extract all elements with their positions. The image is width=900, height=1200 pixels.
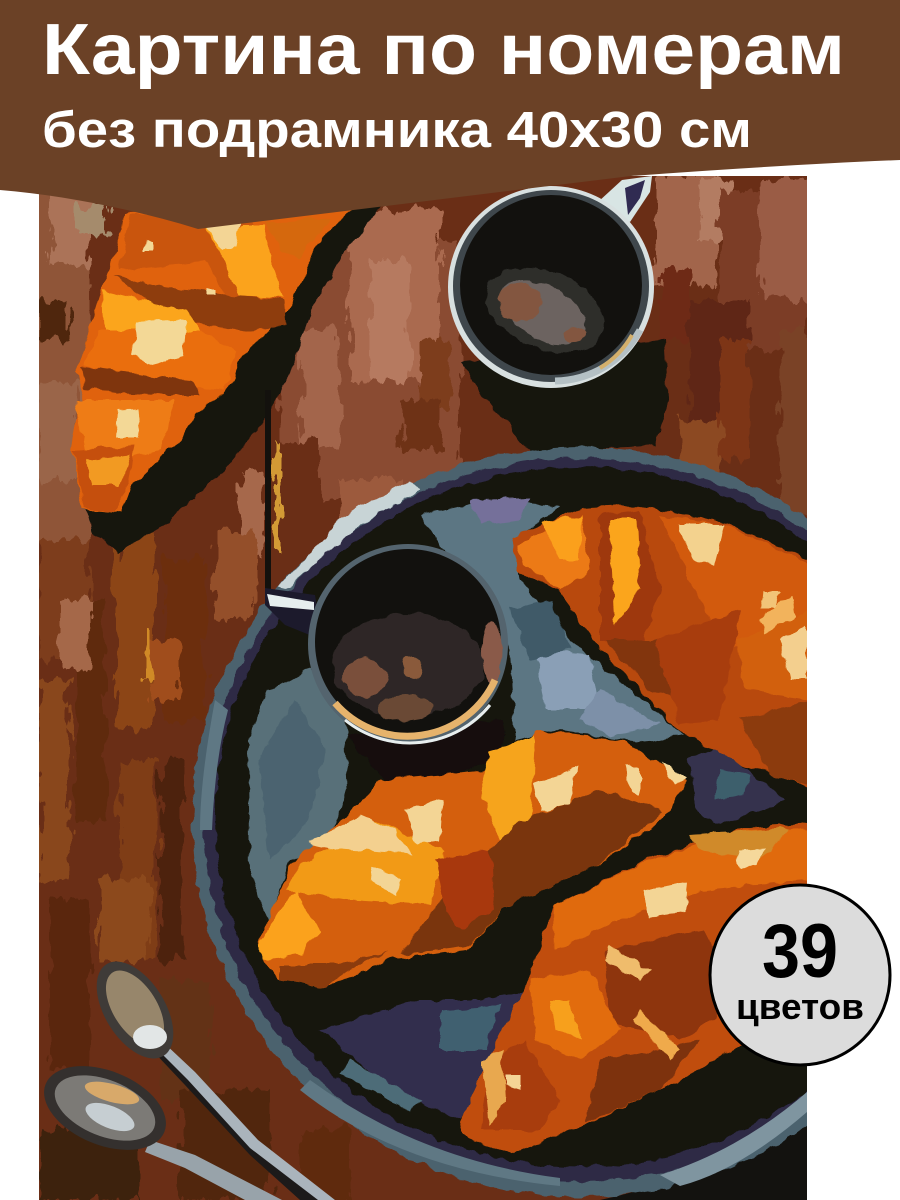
croissant shadow top left — [85, 200, 385, 552]
badge: 39 colours: цветов — [736, 986, 864, 1027]
plate bowl patches — [248, 498, 785, 1120]
wood table background — [20, 160, 830, 1200]
coffee cup shadow top — [460, 340, 668, 452]
subtitle: без подрамника 40х30 см — [42, 101, 752, 158]
spoon upper — [96, 962, 335, 1200]
dark corner behind plate — [600, 1126, 807, 1200]
painting: croissants and coffee — [39, 176, 807, 1200]
badge: 39 colours — [710, 885, 890, 1065]
coffee cup top — [448, 176, 654, 388]
croissant top left — [71, 209, 353, 513]
table crack line — [265, 408, 271, 589]
croissant middle — [257, 731, 688, 988]
plate — [190, 445, 807, 1198]
coffee cup on plate — [265, 544, 508, 780]
croissant lower right — [459, 823, 812, 1154]
title: Картина по номерам — [42, 10, 845, 90]
spoon lower — [44, 1066, 282, 1200]
coffee surface on plate — [332, 613, 502, 721]
badge: 39 colours: 39 — [762, 909, 838, 994]
coffee surface top — [485, 267, 604, 354]
header banner — [0, 0, 900, 229]
croissant right — [512, 505, 812, 787]
cup handle top — [598, 176, 652, 222]
